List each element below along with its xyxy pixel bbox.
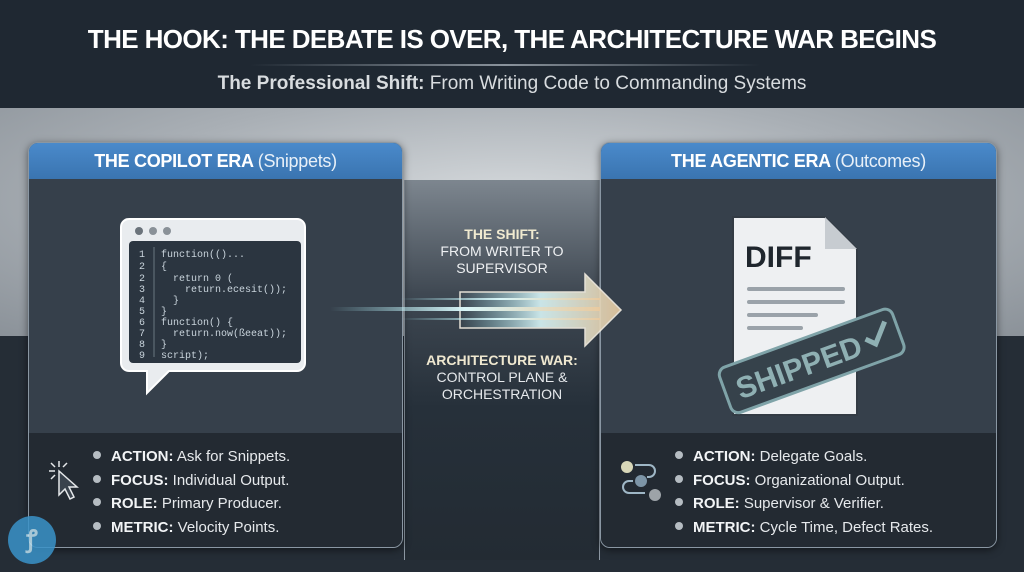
icon: diff shipped: SHIPPED [732,330,867,406]
bullet list: agentic: ACTION: Delegate Goals. [693,448,867,465]
icon: code window bubble: 7 [139,329,145,340]
icon: code window bubble: { [161,261,167,273]
icon: code window bubble: 2 [139,274,145,285]
arrow: glowing shift [336,272,622,348]
text: the shift: THE SHIFT: [464,226,540,242]
panel: agentic era [600,142,997,548]
heading: copilot: THE COPILOT ERA (Snippets) [94,151,337,171]
panel: copilot era [28,142,403,548]
icon: code window bubble: 5 [139,307,145,318]
icon: diff shipped: DIFF [745,241,812,274]
icon: code window bubble: 3 [139,285,145,296]
bullet list: copilot: ACTION: Ask for Snippets. [111,448,290,465]
bullet list: agentic: METRIC: Cycle Time, Defect Rates. [693,518,933,536]
silver band [0,108,1024,336]
icon: code window bubble: } [161,306,167,318]
text: the shift [440,226,564,276]
icon: diff shipped [718,217,906,414]
heading: copilot [29,143,402,179]
icon: code window bubble: return.now(ßeeat)); [173,328,287,340]
icon: logo badge [8,516,56,564]
icon: code window bubble: function(()... [161,249,245,261]
icon: code window bubble: } [173,295,179,307]
icon: code window bubble: 9 [139,351,145,362]
icon: code window bubble: return.ecesit()); [185,284,287,296]
bullet list: copilot: ROLE: Primary Producer. [111,495,282,512]
text: the shift: SUPERVISOR [456,260,548,276]
bullet list: agentic [675,448,933,536]
icon: code window bubble: 8 [139,340,145,351]
heading: agentic: THE AGENTIC ERA (Outcomes) [671,151,926,171]
icon: workflow [621,461,661,501]
text: architecture war: ARCHITECTURE WAR: [426,352,578,368]
text: architecture war: ORCHESTRATION [442,386,562,402]
header band [0,0,1024,108]
text: the shift: FROM WRITER TO [440,243,564,259]
bullet list: copilot: METRIC: Velocity Points. [111,518,279,536]
icon: code window bubble: return 0 ( [173,273,233,285]
icon: logo badge: ꝭ [26,526,38,553]
icon: code window bubble: 1 [139,250,145,261]
subtitle: The Professional Shift: From Writing Code to Commanding Systems [218,73,806,94]
text: architecture war: CONTROL PLANE & [437,369,567,385]
icon: code window bubble: } [161,339,167,351]
icon: code window bubble: 2 [139,262,145,273]
bullet list: agentic: FOCUS: Organizational Output. [693,472,905,488]
icon: code window bubble: 6 [139,318,145,329]
center column [404,180,600,560]
icon: code window bubble: 4 [139,296,145,307]
icon: code window bubble: script); [161,350,209,362]
bullet list: copilot: FOCUS: Individual Output. [111,472,289,488]
icon: code window bubble [120,218,306,396]
icon: code window bubble: function() { [161,317,233,329]
icon: cursor click [49,461,79,500]
heading: agentic [601,143,996,179]
bullet list: agentic: ROLE: Supervisor & Verifier. [693,495,884,512]
title: THE HOOK: THE DEBATE IS OVER, THE ARCHITECTURE WAR BEGINS [88,24,936,54]
text: architecture war [426,352,578,402]
bullet list: copilot [93,448,290,536]
